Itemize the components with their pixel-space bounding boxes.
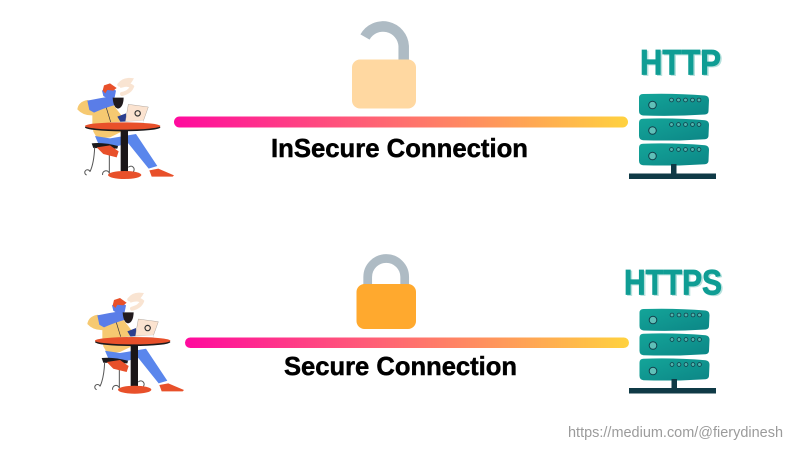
heading: HTTPS: HTTPS xyxy=(626,264,724,304)
label: InSecure Connection: InSecure Connection xyxy=(271,133,528,163)
label: Secure Connection: Secure Connection xyxy=(284,351,517,381)
icon: closed padlock xyxy=(356,258,416,329)
illustration: person at table, secure row xyxy=(87,295,184,394)
icon: HTTP server stack xyxy=(629,94,716,179)
icon: open padlock xyxy=(352,26,416,108)
heading: HTTP: HTTP xyxy=(640,44,721,82)
credit: author URL: https://medium.com/@fierydinesh xyxy=(568,425,783,441)
bar: insecure connection line xyxy=(174,116,628,128)
heading: HTTP: HTTP xyxy=(642,44,722,84)
heading: HTTPS: HTTPS xyxy=(624,264,722,302)
bar: secure connection line xyxy=(185,338,629,348)
illustration: person at table, insecure row xyxy=(77,80,174,179)
icon: HTTPS server stack xyxy=(629,309,716,394)
